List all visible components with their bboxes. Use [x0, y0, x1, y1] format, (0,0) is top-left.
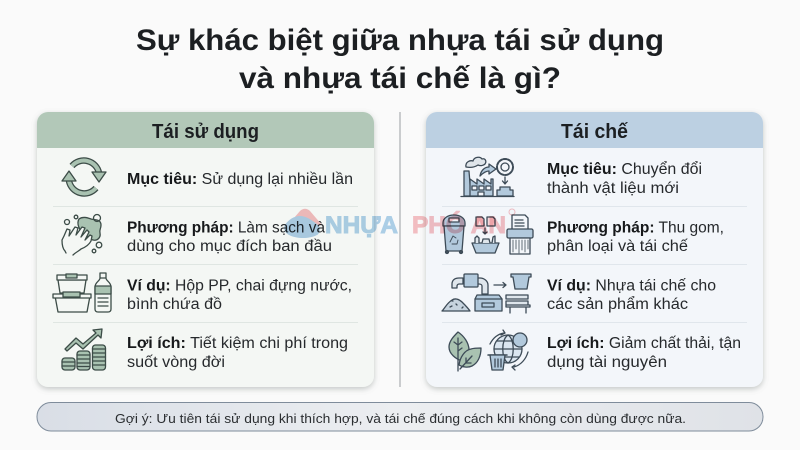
panel: Tái chế — [426, 112, 763, 387]
center divider — [399, 112, 401, 387]
icon: bin, sorting basket and shredder — [443, 215, 533, 254]
text: phương pháp: Phương pháp: Thu gom, — [547, 220, 724, 236]
icon: leaves, globe and bin — [449, 330, 528, 371]
text: ví dụ: Ví dụ: Nhựa tái chế cho — [547, 278, 716, 294]
text: lợi ích: dụng tài nguyên — [547, 354, 667, 371]
text: lợi ích: Lợi ích: Giảm chất thải, tận — [547, 335, 741, 352]
text: phương pháp — [127, 220, 332, 255]
text: phương pháp: Phương pháp: Làm sạch và — [127, 220, 325, 236]
title: Sự khác biệt giữa nhựa tái sử dụng — [136, 24, 664, 57]
footer hint — [37, 402, 763, 431]
title — [136, 24, 664, 95]
footer hint: Gợi ý: Ưu tiên tái sử dụng khi thích hợp, và tái chế đúng cách khi không còn dùng được nữa. — [115, 411, 686, 426]
text: phương pháp: dùng cho mục đích ban đầu — [127, 238, 332, 255]
text: mục tiêu: thành vật liệu mới — [547, 180, 679, 197]
text: mục tiêu: Mục tiêu: Sử dụng lại nhiều lần — [127, 171, 353, 188]
panel header: Tái sử dụng: Tái sử dụng — [152, 121, 259, 143]
text: ví dụ: Ví dụ: Hộp PP, chai đựng nước, — [127, 278, 352, 294]
text: mục tiêu — [547, 161, 702, 197]
watermark logo: PHÓ AN — [412, 211, 506, 239]
text: ví dụ — [547, 278, 716, 313]
icon: rising chart and coins — [62, 329, 106, 370]
panel header: Tái chế: Tái chế — [561, 121, 629, 143]
watermark logo: NHỰA — [325, 212, 398, 239]
text: mục tiêu: Mục tiêu: Chuyển đổi — [547, 161, 702, 178]
panel header: Tái chế — [426, 112, 763, 148]
icon: factory, gear and material — [461, 157, 514, 196]
panel: Tái sử dụng — [37, 112, 374, 387]
text: lợi ích: suốt vòng đời — [127, 354, 225, 371]
icon: recycle arrows — [62, 161, 106, 193]
text: lợi ích — [127, 335, 348, 371]
text: lợi ích — [547, 335, 741, 371]
text: phương pháp — [547, 220, 724, 255]
panel header: Tái sử dụng — [37, 112, 374, 148]
text: phương pháp: phân loại và tái chế — [547, 238, 688, 255]
text: ví dụ: các sản phẩm khác — [547, 296, 688, 313]
text: ví dụ — [127, 278, 352, 313]
watermark logo — [284, 209, 515, 239]
icon: hand washing with sponge — [62, 214, 102, 255]
text: lợi ích: Lợi ích: Tiết kiệm chi phí trong — [127, 335, 348, 352]
icon: recycled pellets into products — [442, 274, 531, 313]
icon: food containers and bottle — [53, 273, 111, 312]
text: ví dụ: bình chứa đồ — [127, 296, 222, 313]
title: và nhựa tái chế là gì? — [239, 62, 561, 95]
